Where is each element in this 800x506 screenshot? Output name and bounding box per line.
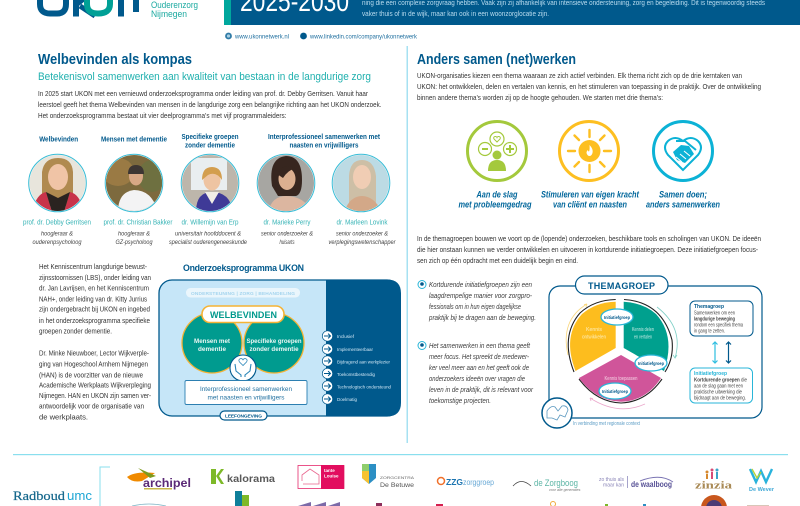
- portrait roles: universitair hoofddocent &: [175, 230, 241, 238]
- left intro text: [38, 89, 382, 120]
- left intro text: leerstoel geeft het thema Welbevinden van mensen in de langdurige zorg een belangrijke richting aan het UKON onderzoek.: [38, 100, 382, 109]
- box: initiatiefgroep: praktische uitwerking die: [694, 390, 742, 396]
- box: initiatiefgroep: Kortdurende groepen die: [694, 378, 747, 384]
- portrait: Marieke Perry: [256, 154, 316, 214]
- icon: problem behaviour: [468, 122, 526, 180]
- bullet: samenwerken in een thema: onderzoekers ideeën over vragen die: [429, 374, 525, 383]
- pill: leefongeving: [220, 411, 267, 420]
- cycle arrows: [566, 304, 677, 409]
- portrait names: prof. dr. Christian Bakker: [104, 218, 173, 226]
- portrait roles: [32, 230, 396, 246]
- programme headings: [39, 132, 381, 150]
- portrait: Debby Gerritsen: [28, 154, 88, 214]
- portrait names: prof. dr. Debby Gerritsen: [23, 218, 91, 226]
- pill: themagroep: [576, 276, 668, 294]
- left column text: dr. Jan Lavrijsen, en het Kenniscentrum: [39, 284, 149, 292]
- icon: handshake heart: [654, 122, 712, 180]
- box: initiatiefgroep: Initiatiefgroep: [694, 371, 727, 377]
- icon: hands with heart: [230, 355, 256, 381]
- circle: mensen met dementie: dementie: [198, 346, 226, 353]
- programme headings: Specifieke groepen: [182, 132, 238, 141]
- arrow list: [322, 331, 391, 404]
- box: initiatiefgroep: [690, 368, 752, 403]
- diagram title: Onderzoeksprogramma UKON: [183, 263, 304, 273]
- circle: specifieke groepen: [244, 313, 304, 373]
- portrait: Christian Bakker: [102, 154, 166, 214]
- logo: tante Louise: Louise: [324, 474, 339, 478]
- banner text: vaker thuis of in de wijk, maar kan ook in een woonzorglocatie zijn.: [362, 9, 549, 18]
- bullet: kortdurende initiatiefgroepen: praktijk bij te dragen aan de beweging.: [428, 313, 536, 322]
- caption: regional context: In verbinding met regionale context: [573, 421, 640, 427]
- box: initiatiefgroep: bijdraagt aan de beweging.: [694, 396, 746, 402]
- column divider: [406, 46, 408, 443]
- initiatiefgroep ovals: Initiatiefgroep: [602, 389, 628, 394]
- portrait roles: huisarts: [280, 239, 294, 246]
- contact links: www.linkedin.com/company/ukonnetwerk: [309, 34, 418, 40]
- banner text: [362, 0, 765, 18]
- segment: kennis delen en vertalen: en vertalen: [634, 334, 652, 340]
- bullet: samenwerken in een thema: [418, 341, 533, 405]
- logo: De Wever: [749, 469, 775, 493]
- left column text: de werkplaats.: [39, 412, 88, 422]
- right body text: [417, 234, 761, 265]
- header: banner: [224, 0, 800, 25]
- left column text: Academische Werkplaats Wijkverpleging: [39, 380, 151, 390]
- arrow list: Inclusief: [337, 334, 355, 340]
- bullet: kortdurende initiatiefgroepen: laagdrempelige manier voor zorgpro-: [429, 291, 532, 300]
- diagram: Themagroep: [542, 276, 762, 428]
- right body text: sen zich op één opdracht met een duidelijk begin en eind.: [417, 256, 578, 265]
- theme labels: [458, 190, 720, 210]
- bullet: samenwerken in een thema: leven in de praktijk, dit is relevant voor: [429, 385, 533, 394]
- box: themagroep: [690, 301, 753, 336]
- pill: ondersteuning zorg behandeling: ONDERSTEUNING | ZORG | BEHANDELING: [191, 291, 295, 297]
- pill: ondersteuning zorg behandeling: [186, 288, 300, 298]
- logo: de waalboog: de waalboog: [631, 479, 672, 489]
- contact links: [225, 33, 418, 40]
- portrait roles: specialist ouderengeneeskunde: [169, 239, 247, 246]
- logo: De Betuwe: De Betuwe: [380, 482, 414, 489]
- segment: kennis toepassen: [579, 355, 662, 403]
- theme labels: van cliënt en naasten: [553, 200, 627, 210]
- portrait roles: hoogleraar &: [41, 230, 73, 238]
- left column text: Nijmegen. HAN en UKON zijn samen ver-: [39, 391, 151, 400]
- theme labels: Samen doen;: [659, 190, 707, 200]
- arrow list: Toekomstbestendig: [337, 372, 375, 378]
- logo: De Betuwe: ZORGCENTRA: [380, 476, 415, 480]
- logo: archipel: archipel: [143, 476, 191, 490]
- arrow list: Technologisch ondersteund: [337, 384, 391, 390]
- logo: de Zorgboog: voor alle generaties: [549, 488, 581, 492]
- box: themagroep: Themagroep: [694, 304, 724, 310]
- second row of partner logos (cropped): [132, 491, 769, 506]
- programme headings: Interprofessioneel samenwerken met: [268, 132, 381, 141]
- portrait names: dr. Marleen Lovink: [336, 218, 388, 226]
- segment: kennis delen en vertalen: [624, 300, 672, 372]
- left intro text: In 2025 start UKON met een vernieuwd onderzoeksprogramma onder leiding van prof. dr. Debby Gerritsen. Vanuit haar: [38, 89, 368, 98]
- bullet: samenwerken in een thema: Het samenwerken in een thema geeft: [429, 341, 531, 350]
- logo text: [151, 0, 198, 20]
- portrait roles: GZ-psycholoog: [116, 239, 153, 246]
- programme headings: naasten en vrijwilligers: [290, 140, 358, 150]
- portrait roles: senior onderzoeker &: [336, 230, 388, 238]
- bullet: kortdurende initiatiefgroepen: [418, 280, 536, 322]
- left column text: Dr. Minke Nieuwboer, Lector Wijkverple-: [39, 348, 149, 358]
- theme labels: met probleemgedrag: [458, 200, 532, 210]
- logo: ZZG zorggroep: [438, 477, 494, 487]
- pill: welbevinden: [202, 306, 284, 322]
- bullet: samenwerken in een thema: toekomstige projecten.: [429, 396, 491, 405]
- left intro text: Het onderzoeksprogramma bestaat uit vier deelprogramma’s met vijf programmaleiders:: [38, 111, 286, 120]
- arrow list: Doelmatig: [337, 397, 357, 403]
- left column text: [39, 262, 151, 422]
- logo: de Zorgboog: de Zorgboog: [534, 478, 578, 489]
- contact links: www.ukonnetwerk.nl: [234, 34, 289, 40]
- left column text: (HAN) is de voorzitter van de nieuwe: [39, 370, 143, 380]
- logo text: Nijmegen: [151, 9, 187, 20]
- logo: kalorama: kalorama: [227, 474, 275, 485]
- portrait: Willemijn van Erp: [180, 154, 240, 214]
- left column text: zijnsstoornissen (LBS), onder leiding van: [39, 273, 151, 282]
- box: themagroep: Samenwerken om een: [694, 310, 735, 316]
- logo: ZZG zorggroep: ZZG: [446, 477, 463, 487]
- circle: mensen met dementie: Mensen met: [194, 338, 231, 345]
- portrait roles: ouderenpsycholoog: [32, 239, 82, 246]
- icon: regional map: [542, 398, 572, 428]
- right intro text: binnen andere thema’s worden zij op de hoogte gehouden. We starten met drie thema’s:: [417, 93, 663, 102]
- left column text: NAH+, onder leiding van dr. Kitty Jurrius: [39, 294, 147, 304]
- programme headings: Welbevinden: [39, 134, 78, 144]
- logo: Radboudumc: [13, 489, 92, 503]
- left column text: ging van Hogeschool Arnhem Nijmegen: [39, 360, 148, 368]
- portrait roles: senior onderzoeker &: [261, 230, 313, 238]
- left column text: groepen zonder dementie.: [39, 326, 112, 336]
- partner bracket: [100, 467, 110, 506]
- bullet: samenwerken in een thema: ker veel meer aan en het geeft ook de: [429, 363, 529, 372]
- initiatiefgroep ovals: Initiatiefgroep: [638, 361, 664, 366]
- theme labels: Stimuleren van eigen kracht: [541, 190, 640, 200]
- left column text: in het onderzoeksprogramma specifieke: [39, 316, 150, 325]
- programme headings: Mensen met dementie: [101, 134, 167, 144]
- box: themagroep: rondom een specifiek thema: [694, 322, 743, 328]
- logo: ZZG zorggroep: zorggroep: [463, 477, 494, 487]
- portrait roles: verplegingswetenschapper: [328, 239, 396, 246]
- segment: kennis ontwikkelen: [568, 300, 616, 372]
- bullet: kortdurende initiatiefgroepen: Kortdurende initiatiefgroepen zijn een: [429, 280, 532, 289]
- footer rule: [13, 454, 788, 455]
- right heading: Anders samen (net)werken: [417, 52, 576, 68]
- segment: kennis ontwikkelen: ontwikkelen: [582, 334, 606, 340]
- bullet: samenwerken in een thema: meer focus. Het spreekt de medewer-: [429, 352, 529, 361]
- logo: Radboudumc: Radboud: [13, 489, 66, 503]
- portrait: Marleen Lovink: [332, 154, 392, 214]
- portrait names: dr. Marieke Perry: [264, 218, 311, 226]
- left heading: Welbevinden als kompas: [38, 52, 192, 68]
- box: interprofessioneel samenwerken: Interprofessioneel samenwerken: [200, 386, 292, 393]
- logo: tante Louise: tante: [324, 468, 335, 473]
- logo: de waalboog: maar kan: [603, 482, 624, 488]
- segment: kennis delen en vertalen: Kennis delen: [632, 327, 654, 333]
- logo: zinzia: [695, 468, 733, 492]
- left subheading: Betekenisvol samenwerken aan kwaliteit van bestaan in de langdurige zorg: [38, 71, 371, 83]
- initiatiefgroep ovals: [599, 309, 667, 399]
- circle: specifieke groepen: Specifieke groepen: [246, 338, 302, 345]
- circle: mensen met dementie: [182, 313, 242, 373]
- box: themagroep: langdurige beweging: [694, 316, 735, 322]
- programme headings: zonder dementie: [185, 140, 235, 150]
- theme labels: anders samenwerken: [646, 200, 720, 210]
- pill: leefongeving: LEEFONGEVING: [225, 414, 262, 420]
- arrow list: Implementeerbaar: [337, 347, 373, 353]
- diagram frame: [159, 280, 401, 416]
- logo: De Wever: De Wever: [749, 487, 775, 493]
- logo: de waalboog: zo thuis als: [599, 477, 624, 483]
- box: themagroep: in gang te zetten.: [694, 328, 725, 334]
- portrait names: dr. Willemijn van Erp: [182, 218, 238, 226]
- header: logo: [40, 0, 198, 20]
- logo: archipel: [127, 468, 191, 490]
- initiatiefgroep ovals: Initiatiefgroep: [604, 315, 630, 320]
- logo text: Ouderenzorg: [151, 0, 198, 11]
- left column text: zijn ondergebracht bij UKON en ingebed: [39, 304, 150, 314]
- pill: welbevinden: WELBEVINDEN: [210, 310, 277, 320]
- right intro text: [417, 71, 761, 102]
- double arrows: [712, 342, 731, 363]
- bullet: kortdurende initiatiefgroepen: fessionals om in hun eigen dagelijkse: [429, 302, 521, 311]
- icon: sun with flame: [560, 122, 618, 180]
- right intro text: UKON-organisaties kiezen een thema waaraan ze zich actief verbinden. Elk thema richt zich op de drie kerntaken van: [417, 71, 742, 80]
- logo: De Betuwe: [362, 464, 415, 489]
- box: interprofessioneel samenwerken: [185, 380, 307, 404]
- left heading: [38, 52, 371, 83]
- left column text: Het Kenniscentrum langdurige bewust-: [39, 262, 147, 271]
- pill: themagroep: THEMAGROEP: [588, 281, 655, 291]
- theme labels: Aan de slag: [476, 190, 518, 200]
- circle: specifieke groepen: zonder dementie: [250, 346, 299, 353]
- segment: kennis ontwikkelen: Kennis: [586, 327, 602, 333]
- box: interprofessioneel samenwerken: met naasten en vrijwilligers: [208, 394, 285, 402]
- logo: zinzia: zinzia: [695, 480, 733, 492]
- portrait roles: hoogleraar &: [118, 230, 150, 238]
- portrait names: [23, 218, 388, 226]
- left column text: antwoordelijk voor de organisatie van: [39, 402, 144, 410]
- logo: kalorama: [211, 469, 275, 485]
- diagram: Onderzoeksprogramma UKON: [159, 263, 401, 420]
- box: initiatiefgroep: aan de slag gaan met een: [694, 384, 743, 390]
- logo: tante Louise: [298, 465, 344, 489]
- logo: de Zorgboog: [513, 478, 581, 492]
- arrow list: Bijdragend aan werkplezier: [337, 360, 390, 366]
- frame: [549, 286, 762, 418]
- logo: de waalboog: [599, 476, 673, 489]
- segment: kennis toepassen: Kennis toepassen: [604, 376, 638, 382]
- logo: Radboudumc: umc: [67, 489, 92, 503]
